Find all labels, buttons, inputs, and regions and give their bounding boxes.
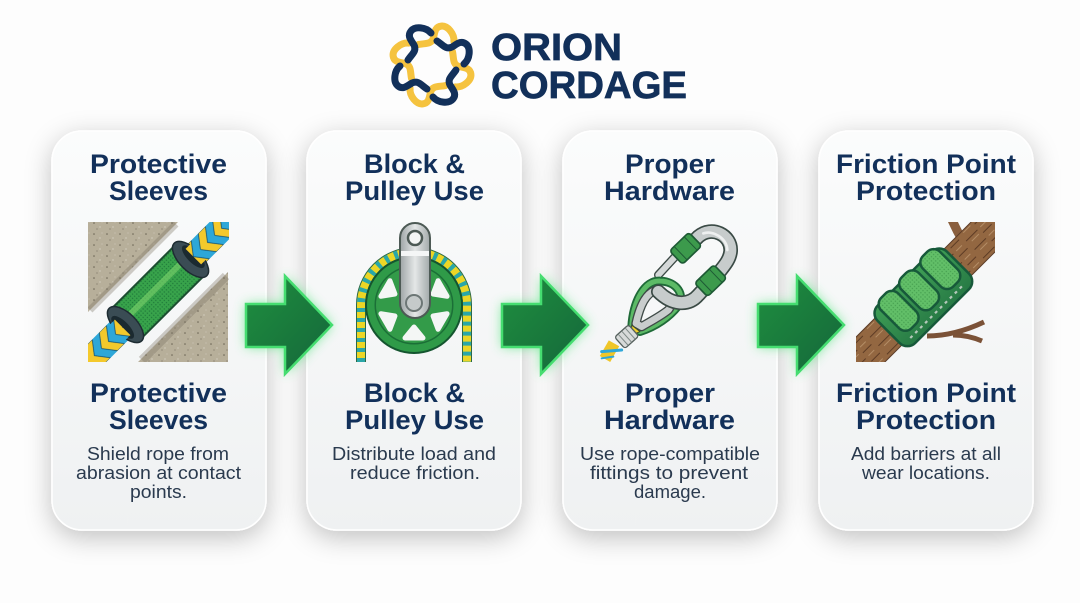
description: Distribute load and [332, 443, 496, 464]
heading [345, 149, 484, 206]
icon: knot emblem [389, 22, 475, 108]
subheading: Proper [625, 378, 716, 408]
description [332, 443, 496, 483]
description: Use rope-compatible [580, 443, 760, 464]
icon: pulley [361, 223, 467, 362]
description: wear locations. [861, 462, 990, 483]
description [580, 443, 760, 502]
description: Shield rope from [87, 443, 229, 464]
description [76, 443, 241, 502]
wordmark: ORION [491, 27, 622, 69]
subheading [345, 378, 484, 435]
description: reduce friction. [350, 462, 480, 483]
heading: Block & [364, 149, 465, 179]
subheading [604, 378, 735, 435]
subheading: Pulley Use [345, 405, 484, 435]
icon: carabiner and thimble [602, 232, 731, 359]
logo: Orion Cordage [389, 22, 687, 108]
icon: rope sleeve [88, 222, 229, 362]
arrow: step 1 to 2 [246, 276, 332, 374]
subheading: Hardware [604, 405, 735, 435]
icon: padded branch [856, 222, 995, 362]
description [851, 443, 1001, 483]
subheading: Protective [90, 378, 227, 408]
subheading: Friction Point [836, 378, 1016, 408]
panel: block and pulley use [307, 131, 521, 530]
subheading [836, 378, 1016, 435]
heading: Hardware [604, 176, 735, 206]
heading: Protection [856, 176, 996, 206]
heading [604, 149, 735, 206]
heading: Friction Point [836, 149, 1016, 179]
description: fittings to prevent [590, 462, 748, 483]
description: points. [130, 481, 187, 502]
arrow: step 2 to 3 [502, 276, 588, 374]
description: abrasion at contact [76, 462, 241, 483]
arrow: step 3 to 4 [758, 276, 844, 374]
subheading: Sleeves [109, 405, 208, 435]
heading: Protective [90, 149, 227, 179]
description: Add barriers at all [851, 443, 1001, 464]
heading: Proper [625, 149, 716, 179]
panel: proper hardware [563, 131, 777, 530]
heading: Sleeves [109, 176, 208, 206]
wordmark [491, 27, 687, 107]
description: damage. [634, 481, 706, 502]
subheading: Protection [856, 405, 996, 435]
subheading [90, 378, 227, 435]
heading [90, 149, 227, 206]
heading [836, 149, 1016, 206]
subheading: Block & [364, 378, 465, 408]
wordmark: CORDAGE [491, 65, 687, 107]
heading: Pulley Use [345, 176, 484, 206]
panel: friction point protection [818, 131, 1033, 530]
panel: protective sleeves [52, 131, 266, 530]
